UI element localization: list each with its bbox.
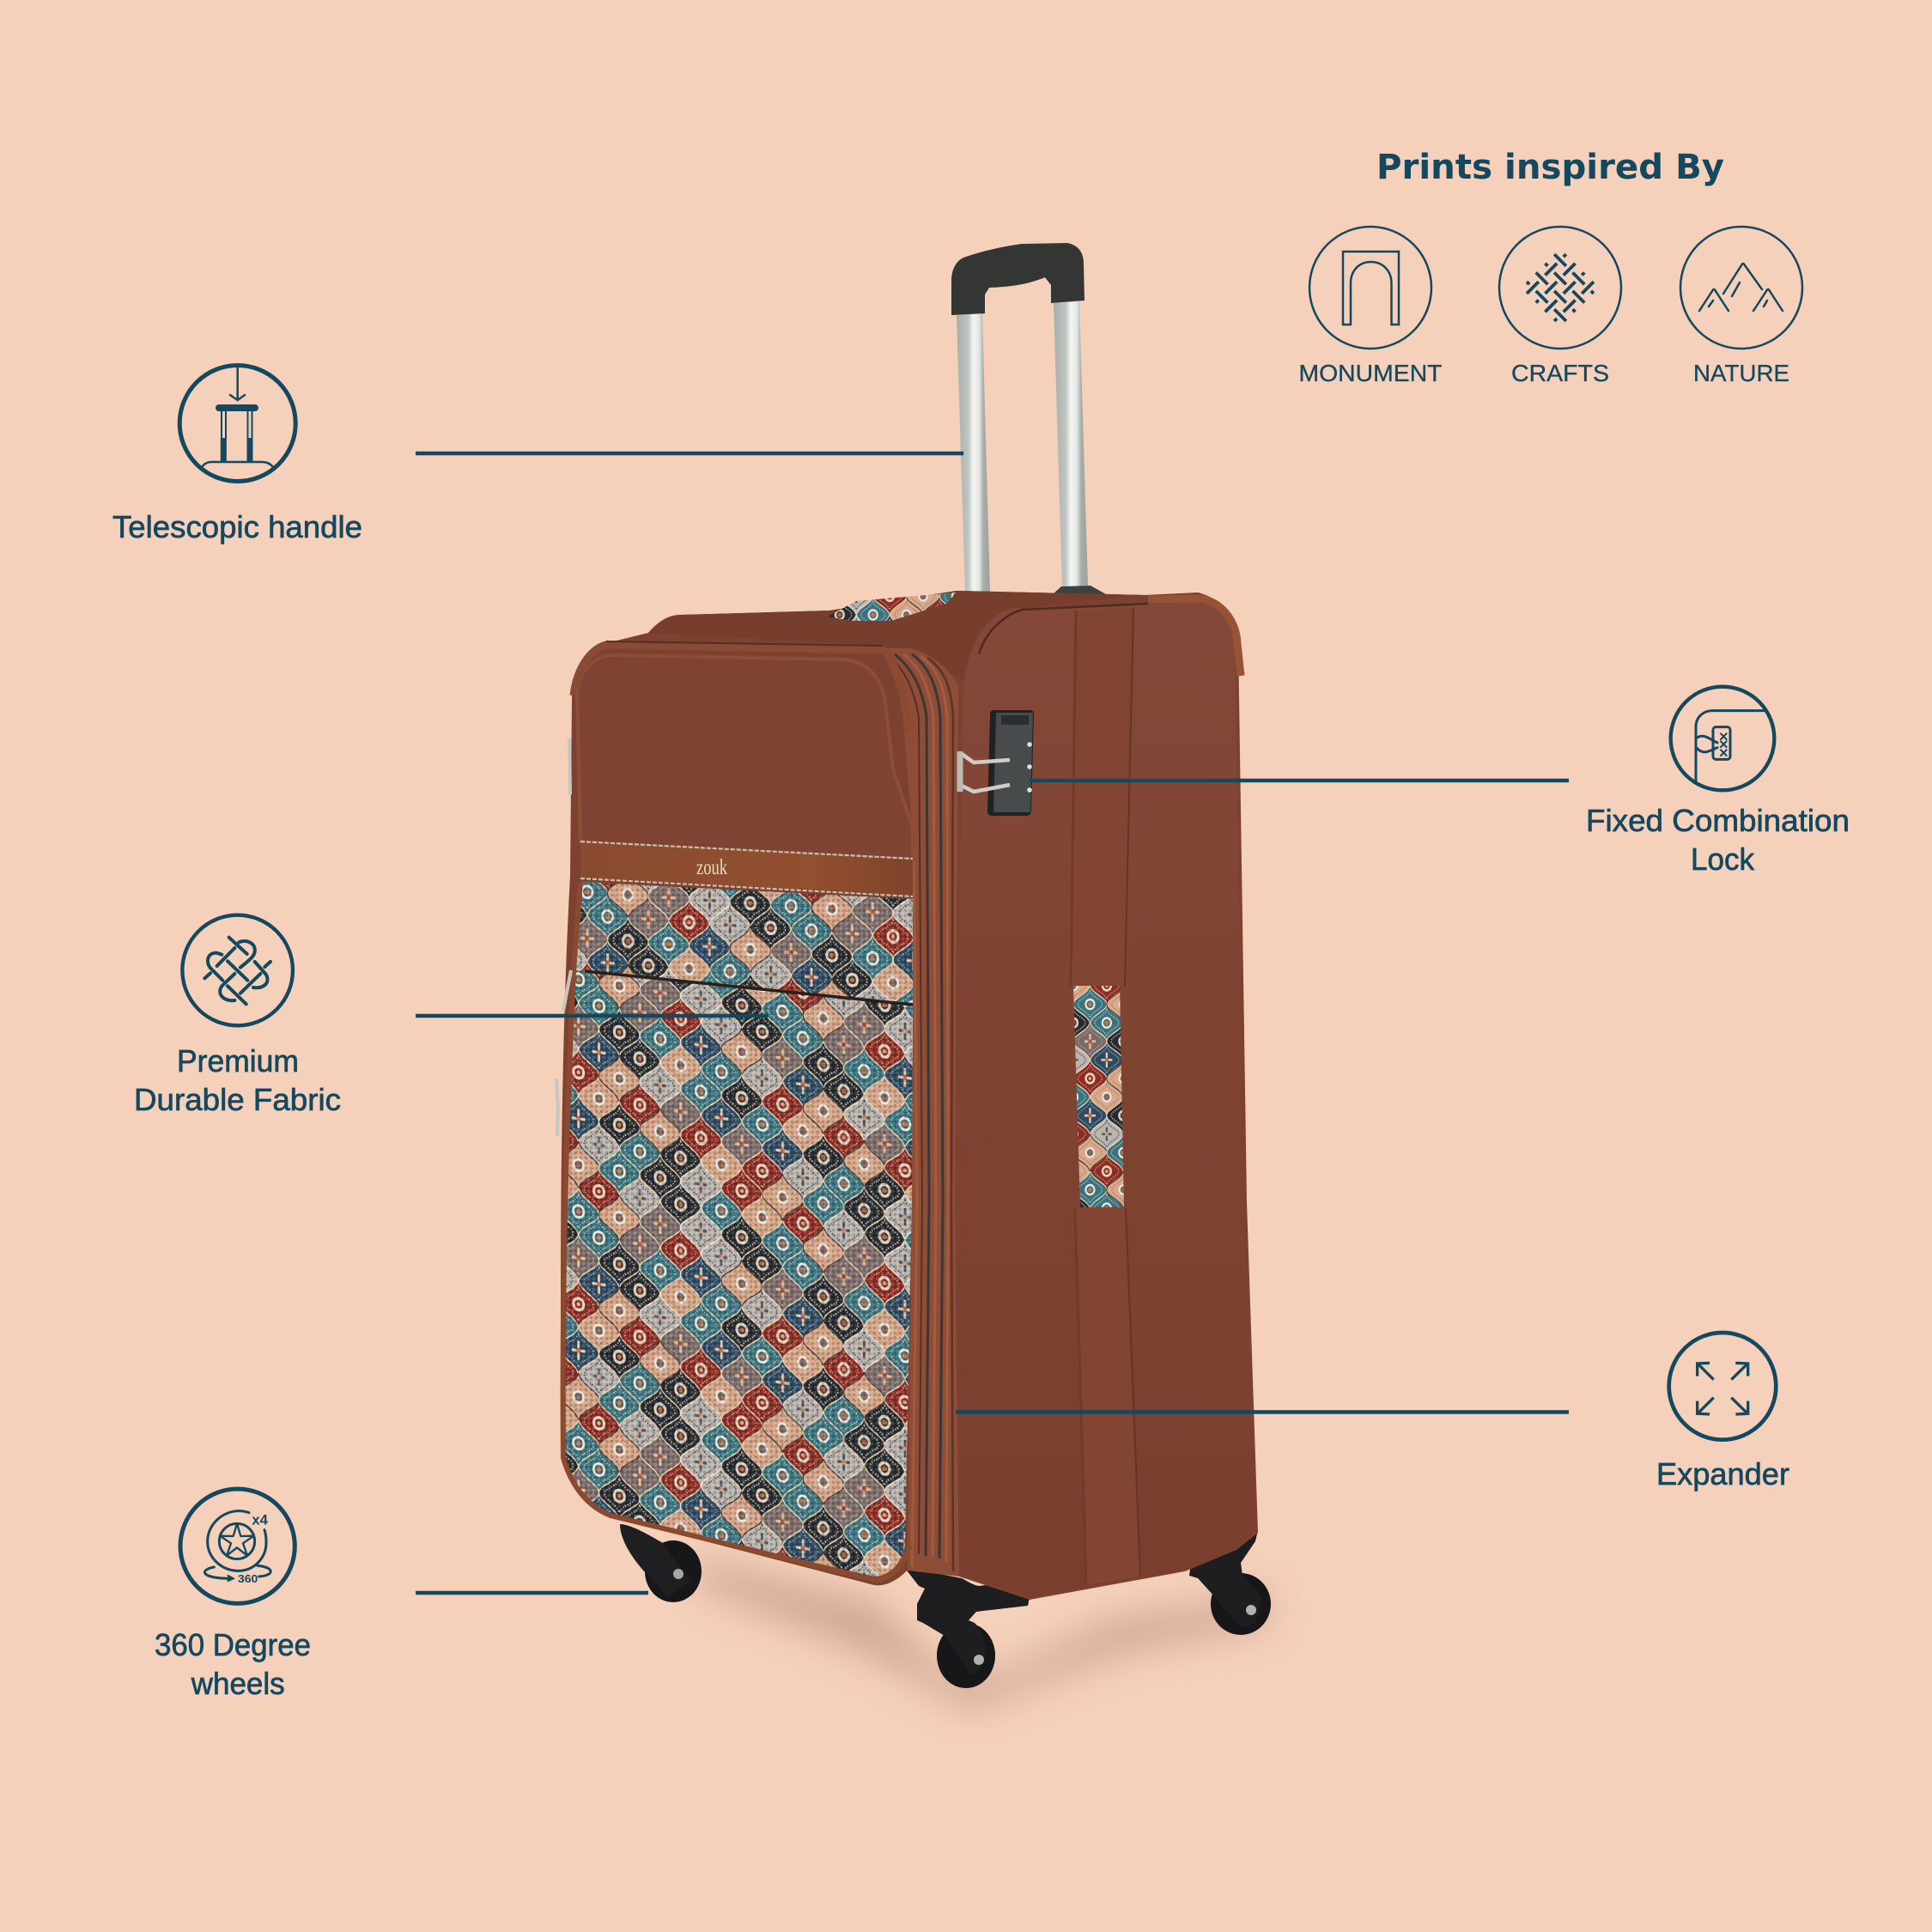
label: nature: NATURE xyxy=(1693,360,1789,386)
heading: prints inspired by: Prints inspired By xyxy=(1376,148,1724,187)
icon: 360 wheels: x4 xyxy=(252,1512,269,1528)
icon: 360 wheels xyxy=(180,1489,295,1603)
label: wheels: wheels xyxy=(191,1666,285,1701)
pocket piping xyxy=(563,882,910,1580)
side inner seam xyxy=(979,604,1148,654)
strip stitches xyxy=(580,841,913,896)
handle grip xyxy=(951,243,1084,315)
label: durable fabric: Durable Fabric xyxy=(134,1082,341,1117)
label: monument: MONUMENT xyxy=(1298,360,1443,386)
label: crafts: CRAFTS xyxy=(1511,360,1609,386)
telescopic tubes xyxy=(957,301,1106,594)
label: premium: Premium xyxy=(177,1043,299,1078)
leader line: telescopic handle xyxy=(416,452,963,455)
wheel: rear right xyxy=(1189,1530,1271,1635)
side strap xyxy=(1071,608,1140,1585)
side panel xyxy=(955,601,1256,1597)
expander zipper band xyxy=(883,648,959,1577)
leader line: expander xyxy=(956,1410,1569,1414)
icon: monument xyxy=(1309,227,1431,349)
icon: combination lock xyxy=(1671,687,1774,790)
label: expander: Expander xyxy=(1656,1456,1789,1492)
icon: crafts xyxy=(1499,227,1621,349)
top zipper teeth xyxy=(606,641,883,646)
mosaic texture xyxy=(563,882,913,1577)
side handle print xyxy=(1073,986,1124,1207)
leader line: lock xyxy=(1030,779,1569,782)
wheel: front corner xyxy=(904,1567,1030,1688)
icon: telescopic handle xyxy=(179,366,295,481)
label: fixed combination: Fixed Combination xyxy=(1586,803,1850,838)
top surface xyxy=(648,591,1145,680)
label: lock: Lock xyxy=(1691,841,1755,877)
icon: premium fabric xyxy=(182,915,293,1025)
icon: expander xyxy=(1669,1333,1776,1440)
printed pocket lower xyxy=(563,970,913,1577)
suitcase photo xyxy=(556,243,1271,1709)
brand logo: zouk xyxy=(696,856,727,879)
top handle xyxy=(828,592,957,621)
combination lock xyxy=(960,710,1034,816)
suitcase body xyxy=(561,591,1258,1600)
label: 360 degree: 360 Degree xyxy=(155,1627,311,1662)
leather strip xyxy=(580,842,913,895)
label: telescopic handle: Telescopic handle xyxy=(112,509,362,544)
wheel: front left xyxy=(620,1524,702,1602)
corner piping xyxy=(1148,598,1241,676)
zipper pulls xyxy=(556,738,571,1136)
leader line: fabric xyxy=(416,1014,769,1018)
icon: 360 wheels: 360 xyxy=(238,1572,258,1585)
printed pocket upper xyxy=(574,882,913,1005)
leader line: wheels xyxy=(416,1591,648,1595)
pocket zipper xyxy=(585,971,913,1005)
icon: nature xyxy=(1680,227,1802,349)
front upper panel xyxy=(577,655,913,860)
ground shadow xyxy=(687,1558,1271,1709)
front top zipper xyxy=(574,645,908,730)
